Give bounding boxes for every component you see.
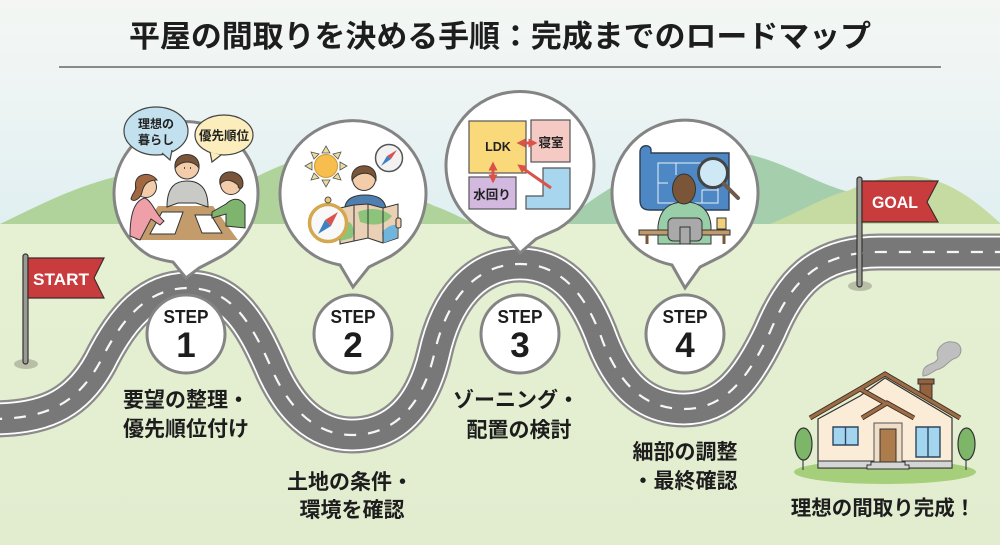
step badge 4: STEP <box>662 307 708 327</box>
step badge 1: STEP <box>164 307 208 327</box>
label step 4: 細部の調整 <box>632 441 738 464</box>
speech bubble: ideal living: 暮らし <box>138 132 174 147</box>
label step 3: ゾーニング・ <box>453 388 579 412</box>
chimney <box>920 382 932 404</box>
roofs <box>810 374 960 418</box>
label step 2 <box>287 471 413 522</box>
speech bubble: ideal living <box>124 107 188 160</box>
windows <box>833 427 858 445</box>
winding road <box>0 252 1000 435</box>
step badge 3 <box>481 295 559 373</box>
room: bedroom: 寝室 <box>538 135 564 150</box>
person from behind <box>658 174 711 244</box>
person left <box>130 174 164 240</box>
title underline <box>59 66 941 68</box>
step badge 1: 1 <box>176 326 196 365</box>
label step 1 <box>123 389 249 441</box>
sky background <box>0 0 1000 224</box>
notebook right <box>195 215 222 233</box>
step badge 2 <box>314 295 392 373</box>
label step 3: 配置の検討 <box>466 419 572 442</box>
person with map <box>345 166 386 215</box>
distant hills <box>0 153 1000 224</box>
desk and chair <box>639 218 730 244</box>
step badge 2: STEP <box>330 307 376 327</box>
label step 2: 環境を確認 <box>300 499 404 522</box>
bubble: step 1 family discussion <box>114 107 258 278</box>
person right <box>212 172 245 228</box>
blueprint <box>640 146 729 210</box>
goal flag: GOAL <box>872 193 918 212</box>
label step 1: 要望の整理・ <box>123 389 249 412</box>
steps <box>867 462 909 469</box>
notebook left <box>150 212 183 234</box>
step badge 3: 3 <box>510 326 530 365</box>
room: water area: 水回り <box>473 187 511 202</box>
bubble: step 4 final check <box>612 120 758 288</box>
step badge 2: 2 <box>343 326 363 365</box>
door <box>874 423 902 462</box>
lawn <box>794 460 976 484</box>
table <box>135 206 238 240</box>
completion text: 理想の間取り完成！ <box>791 496 975 520</box>
speech bubble: ideal living: 理想の <box>138 116 174 131</box>
arrows between rooms <box>493 143 551 188</box>
icon: large compass <box>310 197 346 242</box>
title: 平屋の間取りを決める手順：完成までのロードマップ <box>129 20 871 54</box>
label step 3 <box>453 388 579 442</box>
room: bedroom <box>531 120 570 162</box>
smoke <box>923 342 961 376</box>
trees <box>795 428 975 470</box>
step badge 4 <box>646 295 724 373</box>
label step 4: ・最終確認 <box>632 470 738 493</box>
speech bubble: priorities <box>195 115 253 162</box>
icon: sun <box>305 146 347 187</box>
step badge 4: 4 <box>675 326 695 365</box>
speech bubble: priorities: 優先順位 <box>199 128 249 143</box>
completed house <box>794 342 976 484</box>
bubble: step 2 site survey <box>280 121 426 287</box>
room: LDK: LDK <box>485 140 511 154</box>
walls <box>818 378 952 468</box>
room: blue L-shaped <box>526 168 570 209</box>
start flag: START <box>33 270 90 289</box>
ground <box>0 224 1000 545</box>
label step 1: 優先順位付け <box>123 418 249 441</box>
room: water area <box>469 177 516 209</box>
goal flag <box>848 177 938 291</box>
person center <box>167 154 208 207</box>
step badge 3: STEP <box>498 307 542 327</box>
step badge 1 <box>147 295 225 373</box>
label step 4 <box>632 441 738 493</box>
room: LDK <box>469 121 526 173</box>
folded map <box>340 204 401 244</box>
icon: small compass <box>376 144 402 172</box>
icon: magnifier <box>698 158 738 198</box>
label step 2: 土地の条件・ <box>287 471 413 494</box>
bubble: step 3 zoning <box>446 92 594 253</box>
start flag <box>14 254 104 369</box>
